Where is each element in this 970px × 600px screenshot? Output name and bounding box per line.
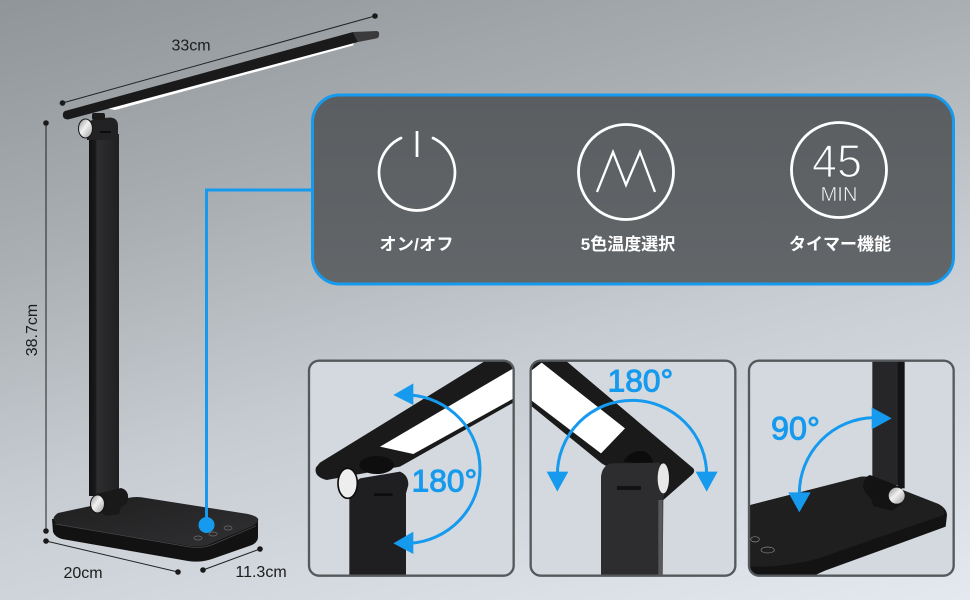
label: five colour temperatures: 5色温度選択 — [581, 234, 675, 254]
lamp base — [747, 477, 947, 577]
panel: head rotation 180 degrees, front — [530, 360, 735, 577]
lamp head — [316, 360, 515, 480]
touch button marks on base — [194, 526, 232, 540]
panel: touch controls — [312, 95, 954, 284]
panel: arm rotation 90 degrees — [747, 360, 954, 577]
hinge — [863, 475, 902, 511]
dimension: lamp head width 33cm: 33cm — [171, 38, 211, 54]
icon: 45 min timer — [792, 122, 886, 218]
dimension: lamp height 38.7cm — [24, 120, 49, 534]
touch icons — [751, 537, 759, 542]
icon: power — [379, 131, 455, 210]
dimension: lamp head width 33cm — [60, 13, 378, 106]
lamp arm — [349, 472, 408, 577]
lamp arm — [87, 118, 119, 496]
connector line from touch button to panel — [198, 190, 312, 533]
lamp head — [530, 360, 694, 500]
lamp head — [63, 31, 379, 120]
rotation arrow — [788, 407, 892, 512]
lamp arm — [872, 360, 898, 485]
product: desk lamp side view — [52, 31, 379, 562]
label: on/off: オン/オフ — [380, 235, 454, 254]
hinge and lower knob — [90, 488, 128, 516]
label: 90 degrees: 90° — [771, 410, 820, 446]
upper silver knob — [78, 119, 92, 138]
label: timer function: タイマー機能 — [789, 234, 891, 254]
lamp base — [52, 497, 258, 562]
dimension: base length 20cm — [43, 538, 181, 582]
icon: mode M — [578, 124, 674, 220]
label: 180 degrees: 180° — [608, 363, 673, 399]
icon: 45 min timer: MIN — [820, 184, 858, 206]
rotation arrow — [547, 400, 718, 492]
dimension: base depth 11.3cm: 11.3cm — [235, 564, 287, 581]
icon: 45 min timer: 45 — [812, 135, 862, 187]
panel: head rotation 180 degrees, side — [309, 360, 515, 577]
dimension: base length 20cm: 20cm — [63, 565, 103, 582]
rotation arrow — [393, 383, 480, 554]
lamp arm — [601, 463, 666, 577]
dimension: base depth 11.3cm — [200, 546, 287, 581]
dimension: lamp height 38.7cm: 38.7cm — [24, 304, 41, 356]
label: 180 degrees: 180° — [412, 463, 477, 499]
